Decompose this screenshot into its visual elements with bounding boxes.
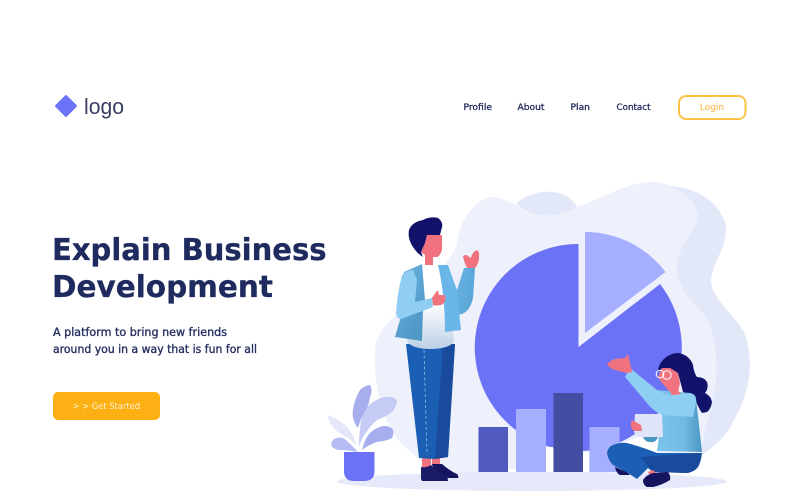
plant	[328, 385, 397, 481]
front ankle	[648, 470, 657, 476]
bar 2	[516, 409, 546, 472]
trousers	[607, 443, 702, 479]
nav: plan: Plan	[570, 103, 590, 113]
nav: about: About	[518, 103, 545, 113]
subtitle: A platform to bring new friends	[53, 325, 227, 339]
nav: profile: Profile	[464, 103, 492, 113]
tablet	[634, 414, 663, 437]
pot	[344, 452, 374, 481]
left arm	[396, 270, 433, 319]
hand pointing	[607, 354, 632, 373]
vest left	[395, 264, 425, 341]
header logo	[56, 94, 124, 119]
background blob top	[517, 192, 577, 216]
shoe back	[432, 464, 458, 478]
hand chest	[432, 290, 446, 306]
shirt	[407, 265, 454, 349]
raised arm	[625, 368, 696, 417]
subtitle: around you in a way that is fun for all	[53, 342, 257, 356]
background blob light	[375, 182, 717, 476]
front shoe	[643, 472, 670, 487]
bar gaps	[508, 447, 589, 472]
trousers dark	[640, 453, 701, 473]
leaf big right	[359, 397, 397, 447]
sweater body	[657, 390, 702, 452]
leaf tall	[353, 385, 372, 428]
background blob dark	[640, 186, 750, 462]
navigation	[464, 103, 651, 113]
crescent under tablet	[643, 437, 658, 442]
ankles	[422, 456, 440, 468]
leaf lower right	[362, 426, 393, 450]
shirt under tablet	[623, 437, 658, 452]
neck	[670, 390, 683, 397]
bar 3	[554, 393, 583, 472]
leaf lower left	[331, 438, 358, 452]
logo diamond	[56, 96, 76, 116]
get started button: > > Get Started	[72, 402, 140, 412]
hair	[658, 353, 712, 413]
man	[395, 217, 479, 481]
trousers shade	[435, 344, 455, 459]
pie chart	[475, 232, 682, 451]
leaf far left	[328, 415, 357, 447]
right arm	[448, 267, 475, 315]
heading: Explain Business	[52, 233, 326, 268]
illustration	[328, 182, 750, 491]
login button	[679, 96, 746, 119]
hair	[409, 217, 442, 257]
bar chart	[478, 393, 620, 472]
woman	[607, 353, 712, 487]
bar 1	[478, 427, 508, 472]
heading	[52, 233, 326, 305]
get started button	[53, 392, 160, 420]
trousers stitching	[424, 350, 427, 455]
bar 4	[590, 427, 620, 472]
ground shadow	[337, 472, 727, 491]
hand raised	[463, 250, 479, 268]
login button: Login	[700, 103, 724, 113]
nav: contact: Contact	[616, 103, 651, 113]
pie main	[475, 244, 682, 451]
hand on tablet	[631, 420, 642, 431]
pie slice	[585, 232, 666, 333]
subtitle	[53, 325, 257, 356]
trousers	[406, 344, 455, 459]
face	[658, 368, 680, 392]
logo wordmark: logo	[84, 94, 124, 119]
vest right	[438, 265, 461, 332]
far shoe	[615, 467, 630, 475]
heading: Development	[52, 270, 273, 305]
neck and face	[421, 235, 442, 265]
shoe front	[421, 465, 448, 481]
glasses	[656, 370, 671, 379]
